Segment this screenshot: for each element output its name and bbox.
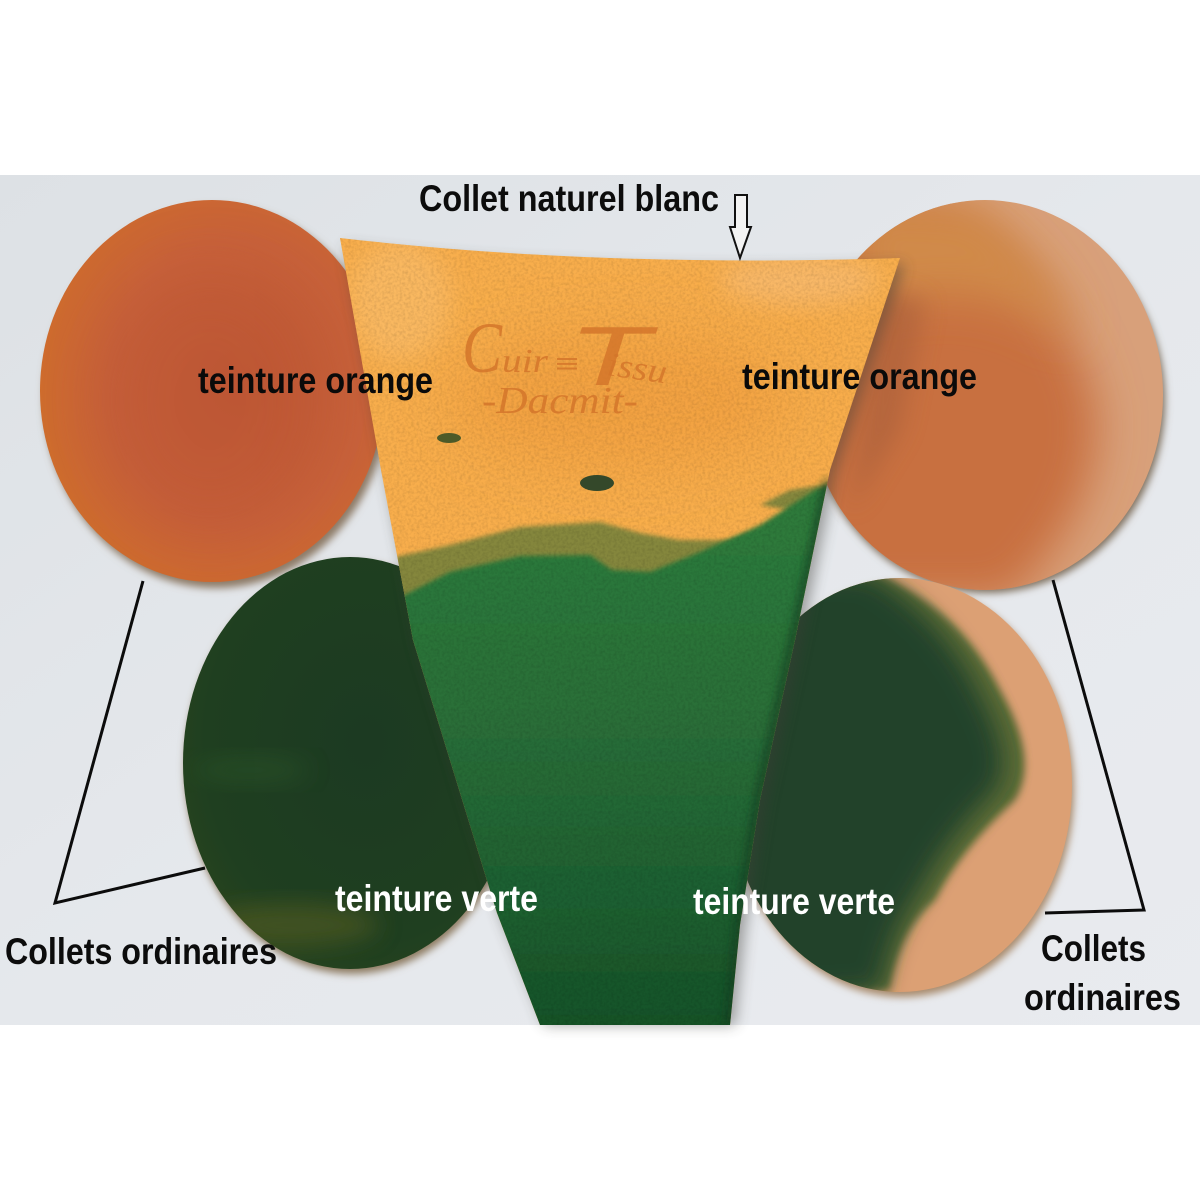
- logo: embossed brand stamp: issu: [605, 346, 669, 391]
- olive transition band: [395, 482, 840, 640]
- infographic: leather collars dye comparison: [0, 175, 1200, 1034]
- logo: embossed brand stamp: C: [462, 308, 503, 388]
- label: Collets ordinaires right: ordinaires: [1024, 977, 1181, 1018]
- label: teinture orange right: teinture orange: [742, 356, 977, 397]
- logo: embossed brand stamp: [462, 308, 669, 422]
- logo: embossed brand stamp: ≡: [555, 348, 579, 379]
- circle: top-left orange collar: [40, 200, 388, 588]
- photo background: [0, 175, 1200, 1025]
- circle: bottom-right partly dyed collar: [728, 570, 1074, 1000]
- circle: top-right orange collar: [800, 200, 1165, 600]
- logo: embossed brand stamp: T: [568, 309, 659, 403]
- label: Collets ordinaires left: Collets ordinaires: [5, 931, 277, 972]
- title label: Collet naturel blanc: Collet naturel blanc: [419, 178, 719, 219]
- logo: embossed brand stamp: uir: [502, 343, 549, 380]
- logo: embossed brand stamp: -Dacmit-: [482, 380, 638, 422]
- label: teinture verte left: teinture verte: [335, 878, 538, 919]
- wedge: natural white collar dyed orange and green: [340, 238, 905, 1030]
- dye spots: [437, 433, 461, 443]
- dark right wedge edge: [728, 480, 828, 1025]
- bracket lines: right collars: [1045, 580, 1144, 913]
- arrow: down to wedge: [730, 195, 751, 258]
- label: Collets ordinaires right: Collets: [1041, 928, 1146, 969]
- label: Collets ordinaires right: [1024, 928, 1181, 1018]
- bracket lines: left collars: [55, 581, 205, 903]
- leather grain: [340, 238, 900, 1028]
- green dyed area: [395, 480, 850, 1030]
- circle: bottom-left green collar: [183, 557, 519, 974]
- label: teinture orange left: teinture orange: [198, 360, 433, 401]
- label: teinture verte right: teinture verte: [693, 881, 895, 922]
